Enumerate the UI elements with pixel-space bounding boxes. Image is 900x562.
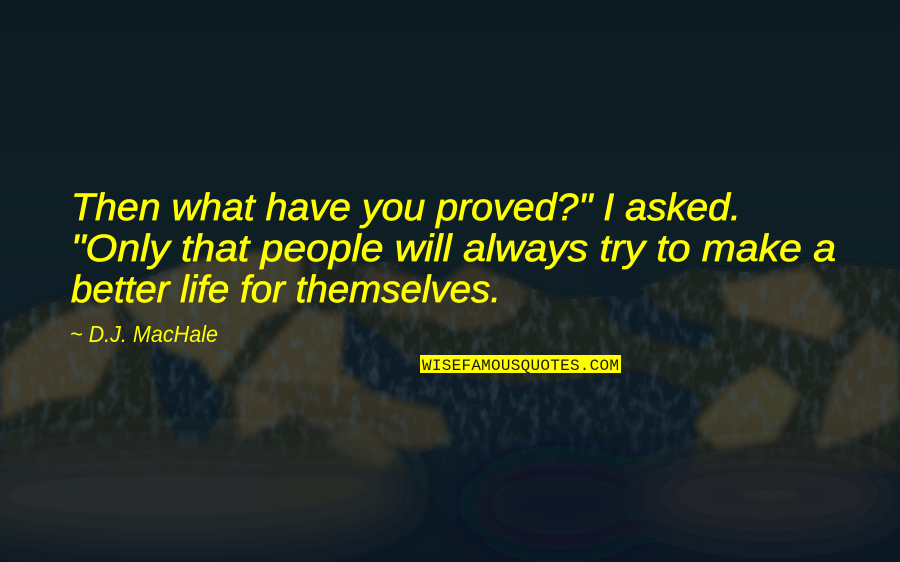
background: mountain range bbox=[0, 248, 900, 470]
quote poster bbox=[0, 192, 900, 562]
quote text: better life for themselves. bbox=[71, 269, 501, 311]
author attribution: ~ D.J. MacHale bbox=[70, 321, 218, 347]
quote text: "Only that people will always try to make a bbox=[71, 228, 836, 270]
background: clouds bbox=[0, 444, 895, 550]
mountain texture bbox=[0, 252, 900, 458]
watermark badge: WISEFAMOUSQUOTES.COM bbox=[422, 357, 619, 375]
quote text bbox=[71, 187, 836, 311]
quote text: Then what have you proved?" I asked. bbox=[71, 187, 741, 229]
